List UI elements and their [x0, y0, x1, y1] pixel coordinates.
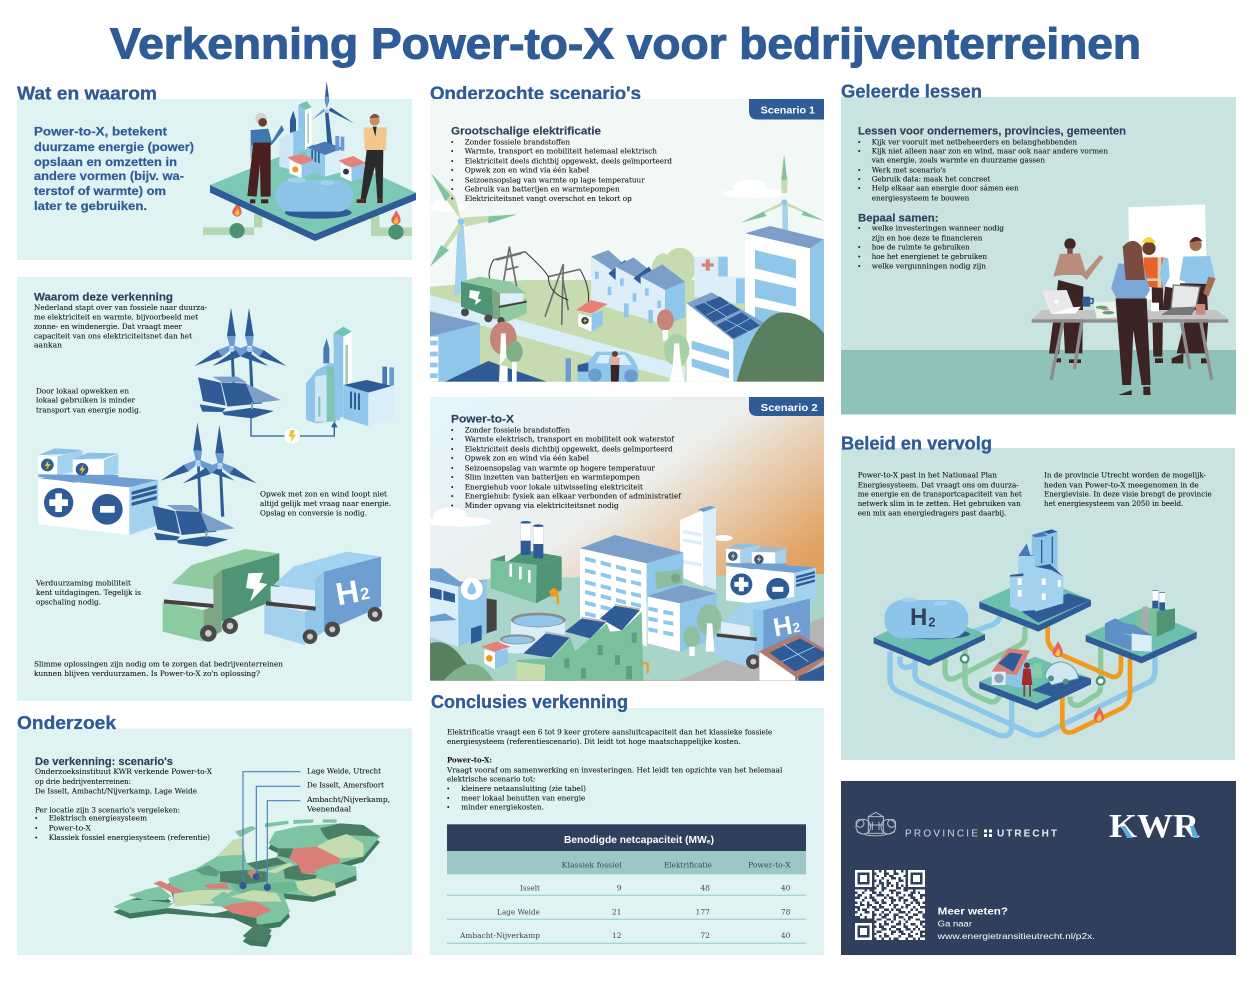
text block: onderzoek: Klassiek fossiel energiesysteem (referentie)	[49, 833, 210, 842]
text: slimme oplossingen: kunnen blijven verduurzamen. Is Power-to-X zo'n oplossing?	[34, 669, 260, 678]
tab: scenario 1	[749, 99, 824, 120]
text: verduurzaming mobiliteit	[35, 578, 141, 606]
text block: conclusies: •	[447, 795, 450, 802]
panel: conclusies verkenning	[430, 692, 824, 955]
table: benodigde netcapaciteit: 177	[696, 907, 710, 916]
arrow: energy line with bolt	[251, 413, 334, 436]
text: opwek met zon en wind	[260, 489, 391, 517]
text: lokaal opwekken: Door lokaal opwekken en	[36, 386, 129, 395]
text: provincie utrecht	[1044, 471, 1212, 508]
text: lessen voor ondernemers: •	[858, 139, 861, 146]
labels: locations: Veenendaal	[306, 804, 352, 813]
text: power-to-x scenario: Elektriciteit deels dichtbij opgewekt, deels geïmporteerd	[465, 444, 673, 453]
text block: power-to-x definition: terstof of warmte) om	[34, 186, 166, 198]
illustration: electric and hydrogen trucks	[163, 549, 382, 645]
panel: scenario 2	[425, 397, 824, 681]
text: grootschalige elektrificatie: •	[451, 149, 454, 156]
text: lokaal opwekken: transport van energie nodig.	[36, 405, 141, 414]
text: grootschalige elektrificatie	[451, 126, 672, 203]
text: power-to-x scenario: •	[451, 493, 454, 500]
location markers with leader lines	[239, 772, 300, 891]
table: benodigde netcapaciteit: Klassiek fossiel	[562, 861, 622, 870]
woman seen from behind	[1111, 241, 1151, 395]
text block: onderzoek: •	[35, 816, 38, 823]
labels: locations: Lage Weide, Utrecht	[307, 766, 381, 775]
illustration: scenario 1 landscape	[430, 155, 824, 383]
text block: introduction: aankan	[34, 341, 62, 350]
text: lokaal opwekken	[36, 386, 141, 414]
illustration: connected energy system: H	[910, 604, 927, 631]
text: bepaal samen: Bepaal samen:	[858, 213, 938, 225]
text: bepaal samen: hoe de ruimte te gebruiken	[872, 243, 970, 252]
text: nationaal plan: een mix aan energiedragers past daarbij.	[858, 508, 1006, 517]
table: benodigde netcapaciteit: 78	[781, 907, 791, 916]
text block: power-to-x definition	[34, 127, 194, 213]
panel: onderzoek	[17, 713, 412, 955]
text: lessen voor ondernemers: •	[858, 149, 861, 156]
heading: onderzochte scenario's: Onderzochte scenario's	[430, 84, 641, 104]
text block: onderzoek: •	[35, 835, 38, 842]
text block: conclusies	[446, 727, 783, 812]
labels: locations	[306, 766, 390, 813]
panel: footer with logos and link	[841, 781, 1236, 955]
illustration: connected energy system: 2	[928, 616, 935, 630]
text: bepaal samen: •	[858, 245, 861, 252]
text: grootschalige elektrificatie: Zonder fossiele brandstoffen	[465, 137, 570, 146]
text block: power-to-x definition: opslaan en omzetten in	[34, 157, 177, 169]
text block: onderzoek: Power-to-X	[49, 823, 92, 832]
text block: power-to-x definition: later te gebruiken.	[34, 201, 147, 213]
text: power-to-x scenario: •	[451, 465, 454, 472]
text: power-to-x scenario: •	[451, 484, 454, 491]
text: verduurzaming mobiliteit: opschaling nodig.	[36, 597, 101, 606]
table: benodigde netcapaciteit: 48	[700, 884, 710, 893]
text: power-to-x scenario: Zonder fossiele brandstoffen	[465, 425, 570, 434]
text: lessen voor ondernemers: Kijk ver vooruit met netbeheerders en belanghebbenden	[872, 137, 1077, 146]
text block: onderzoek: Per locatie zijn 3 scenario's vergeleken:	[35, 805, 180, 814]
text: lessen voor ondernemers	[858, 126, 1126, 202]
text: lessen voor ondernemers: Werk met scenario's	[872, 165, 946, 174]
text block: conclusies: meer lokaal benutten van energie	[461, 793, 586, 802]
table: benodigde netcapaciteit: 40	[781, 931, 791, 940]
text block: conclusies: Power-to-X:	[447, 756, 492, 765]
text: power-to-x scenario: •	[451, 456, 454, 463]
text: grootschalige elektrificatie: •	[451, 158, 454, 165]
text block: power-to-x definition: duurzame energie (power)	[34, 142, 194, 154]
text: grootschalige elektrificatie: •	[451, 196, 454, 203]
text: power-to-x scenario	[451, 414, 682, 510]
table: benodigde netcapaciteit	[447, 824, 806, 944]
panel: waarom deze verkenning	[17, 277, 412, 701]
text: opwek met zon en wind: Opslag en conversie is nodig.	[260, 508, 367, 517]
text: power-to-x scenario: Slim inzetten van batterijen en warmtepompen	[465, 473, 640, 482]
text: lessen voor ondernemers: Help elkaar aan energie door sámen een	[872, 184, 1019, 193]
text: opwek met zon en wind: Opwek met zon en wind loopt niet	[260, 489, 387, 498]
text: grootschalige elektrificatie: Elektriciteit deels dichtbij opgewekt, deels geïmporteerd	[465, 156, 672, 165]
text: lessen voor ondernemers: van energie, zoals warmte en duurzame gassen	[871, 156, 1045, 165]
text: lessen voor ondernemers: Kijk niet alleen naar zon en wind, maar ook naar andere vormen	[872, 147, 1108, 156]
text block: conclusies: kleinere netaansluiting (zie tabel)	[461, 784, 586, 793]
map: netherlands by region	[113, 772, 380, 947]
text: provincie utrecht: In de provincie Utrecht worden de mogelijk-	[1044, 471, 1206, 480]
text: grootschalige elektrificatie: Elektriciteitsnet vangt overschot en tekort op	[465, 194, 632, 203]
text: power-to-x scenario: Seizoensopslag van warmte op hogere temperatuur	[465, 463, 655, 472]
text: bepaal samen: •	[858, 263, 861, 270]
tab: scenario 2: Scenario 2	[761, 402, 818, 414]
text: grootschalige elektrificatie: •	[451, 168, 454, 175]
text block: power-to-x definition: Power-to-X, betekent	[34, 127, 167, 139]
text: power-to-x scenario: •	[451, 427, 454, 434]
text: power-to-x scenario: •	[451, 446, 454, 453]
text block: conclusies: minder energiekosten.	[461, 803, 544, 812]
text: grootschalige elektrificatie: Warmte, transport en mobiliteit helemaal elektrisch	[465, 147, 657, 156]
text block: power-to-x definition: andere vormen (bijv. wa-	[34, 171, 184, 183]
text block: introduction: me elektriciteit en warmte, bijvoorbeeld met	[34, 313, 198, 322]
logo: provincie utrecht: PROVINCIE	[905, 829, 978, 840]
logo: provincie utrecht	[856, 812, 1057, 840]
text: verduurzaming mobiliteit: Verduurzaming mobiliteit	[35, 578, 131, 587]
illustration: battery with wind and solar	[38, 422, 257, 547]
text: grootschalige elektrificatie: •	[451, 177, 454, 184]
text: meer weten	[936, 906, 1095, 941]
table: benodigde netcapaciteit: Power-to-X	[748, 861, 791, 870]
text: provincie utrecht: Energievisie. In deze visie brengt de provincie	[1044, 490, 1212, 499]
table: benodigde netcapaciteit: 12	[612, 931, 622, 940]
text: nationaal plan: netwerk slim in te zetten. Het gebruiken van	[858, 499, 1021, 508]
table: benodigde netcapaciteit: Isselt	[520, 884, 540, 893]
text: grootschalige elektrificatie: •	[451, 139, 454, 146]
panel: wat en waarom	[17, 81, 416, 260]
text: bepaal samen	[858, 213, 1004, 270]
text: bepaal samen: welke investeringen wanneer nodig	[872, 224, 1004, 233]
illustration: connected energy system	[874, 529, 1197, 736]
table	[1032, 310, 1228, 319]
text: lokaal opwekken: lokaal gebruiken is minder	[36, 396, 135, 405]
text: lessen voor ondernemers: •	[858, 177, 861, 184]
table: benodigde netcapaciteit: Ambacht-Nijverkamp	[459, 931, 540, 940]
illustration: electric and hydrogen trucks: H	[333, 573, 362, 612]
text: nationaal plan: Power-to-X past in het Nationaal Plan	[858, 471, 997, 480]
text: power-to-x scenario: Energiehub voor lokale uitwisseling elektriciteit	[465, 482, 643, 491]
text block: introduction: zonne- en windenergie. Dat vraagt meer	[34, 322, 182, 331]
qr code	[855, 871, 925, 939]
labels: locations: De Isselt, Amersfoort	[307, 781, 384, 790]
labels: locations: Ambacht/Nijverkamp,	[306, 795, 390, 804]
text block: onderzoek: op drie bedrijventerreinen:	[35, 777, 131, 786]
table: benodigde netcapaciteit: 72	[700, 931, 710, 940]
text block: introduction: capaciteit van ons elektriciteitsnet dan het	[34, 331, 192, 340]
text: lessen voor ondernemers: energiesysteem te bouwen	[872, 193, 969, 202]
logo: kwr: KWR	[1109, 808, 1199, 845]
text: power-to-x scenario: Warmte elektrisch, transport en mobiliteit ook waterstof	[465, 435, 675, 444]
table: benodigde netcapaciteit: 40	[781, 884, 791, 893]
text: bepaal samen: welke vergunningen nodig zijn	[872, 261, 986, 270]
text block: onderzoek: Elektrisch energiesysteem	[49, 814, 147, 823]
text: power-to-x scenario: Opwek zon en wind via één kabel	[465, 454, 590, 463]
table: benodigde netcapaciteit: 9	[617, 884, 622, 893]
subheading: de verkenning scenario's: De verkenning: scenario's	[35, 756, 173, 768]
text: grootschalige elektrificatie: Opwek zon en wind via één kabel	[465, 166, 590, 175]
text: slimme oplossingen	[34, 659, 283, 678]
text block: conclusies: Vraagt vooraf om samenwerking en investeringen. Het leidt ten opzichte van het helemaal	[446, 765, 783, 774]
text: bepaal samen: •	[858, 226, 861, 233]
illustration: people meeting around a table	[1032, 204, 1228, 395]
illustration: electric and hydrogen trucks: 2	[359, 584, 371, 604]
table: benodigde netcapaciteit: Elektrificatie	[664, 861, 712, 870]
text: verduurzaming mobiliteit: kent uitdagingen. Tegelijk is	[36, 588, 141, 597]
illustration: platform with people and energy system	[203, 81, 416, 241]
panel: geleerde lessen	[841, 82, 1236, 414]
text: power-to-x scenario: Minder opvang via elektriciteitsnet nodig	[465, 501, 619, 510]
table: benodigde netcapaciteit: Lage Weide	[497, 907, 540, 916]
text: meer weten: Ga naar	[938, 920, 972, 929]
text: grootschalige elektrificatie: Gebruik van batterijen en warmtepompen	[465, 185, 620, 194]
text: grootschalige elektrificatie: Grootschalige elektrificatie	[451, 126, 601, 138]
title: Verkenning Power-to-X voor bedrijventerreinen	[110, 19, 1141, 68]
text block: introduction: Nederland stapt over van fossiele naar duurza-	[34, 303, 207, 312]
text: nationaal plan	[858, 471, 1022, 517]
text block: conclusies: •	[447, 786, 450, 793]
text block: onderzoek: De Isselt, Ambacht/Nijverkamp, Lage Weide	[35, 786, 197, 795]
text: bepaal samen: •	[858, 254, 861, 261]
text: nationaal plan: me energie en de transportcapaciteit van het	[858, 490, 1022, 499]
text: nationaal plan: Energiesysteem. Dat vraagt ons om duurza-	[858, 480, 1019, 489]
text: meer weten: Meer weten?	[938, 906, 1008, 917]
text: opwek met zon en wind: altijd gelijk met vraag naar energie.	[260, 499, 391, 508]
text: provincie utrecht: heden van Power-to-X meegenomen in de	[1044, 480, 1199, 489]
text block: onderzoek	[35, 767, 213, 842]
panel: beleid en vervolg	[841, 434, 1235, 760]
text: lessen voor ondernemers: Gebruik data: maak het concreet	[872, 175, 990, 184]
text: bepaal samen: zijn en hoe deze te financieren	[872, 233, 982, 242]
illustration: scenario 2 landscape: 2	[792, 620, 801, 636]
text: lessen voor ondernemers: •	[858, 167, 861, 174]
text: grootschalige elektrificatie: •	[451, 187, 454, 194]
tab: scenario 2	[749, 397, 824, 416]
table: benodigde netcapaciteit: Benodigde netcapaciteit (MWₑ)	[564, 835, 714, 846]
text block: conclusies: •	[447, 805, 450, 812]
text block: conclusies: elektrische scenario tot:	[447, 774, 535, 783]
heading: wat en waarom: Wat en waarom	[17, 84, 157, 104]
heading: geleerde lessen: Geleerde lessen	[841, 82, 982, 102]
text block: conclusies: energiesysteem (referentiescenario). Dit leidt tot hoge maatschappelijke kosten.	[447, 737, 741, 746]
heading: waarom deze verkenning: Waarom deze verkenning	[34, 292, 173, 304]
text: power-to-x scenario: •	[451, 475, 454, 482]
text: lessen voor ondernemers: Lessen voor ondernemers, provincies, gemeenten	[858, 126, 1126, 138]
text: power-to-x scenario: Power-to-X	[451, 414, 515, 426]
text block: onderzoek: Onderzoeksinstituut KWR verkende Power-to-X	[35, 767, 213, 776]
tab: scenario 1: Scenario 1	[761, 104, 815, 116]
text: meer weten: www.energietransitieutrecht.nl/p2x.	[936, 932, 1095, 941]
text: grootschalige elektrificatie: Seizoensopslag van warmte op lage temperatuur	[465, 175, 645, 184]
illustration: scenario 2 landscape: H	[771, 610, 795, 643]
text block: onderzoek: •	[35, 825, 38, 832]
panel: scenario 1	[430, 99, 824, 383]
logo: provincie utrecht: UTRECHT	[997, 829, 1057, 840]
illustration: scenario 2 landscape	[425, 506, 824, 681]
heading: conclusies verkenning: Conclusies verkenning	[431, 692, 628, 712]
text: provincie utrecht: het energiesysteem van 2050 in beeld.	[1044, 499, 1183, 508]
text: power-to-x scenario: •	[451, 503, 454, 510]
text block: conclusies: Elektrificatie vraagt een 6 tot 9 keer grotere aansluitcapaciteit dan het klassieke fossiele	[447, 727, 773, 736]
table: benodigde netcapaciteit: 21	[612, 907, 622, 916]
text: slimme oplossingen: Slimme oplossingen zijn nodig om te zorgen dat bedrijventerreinen	[34, 659, 283, 668]
heading: beleid en vervolg: Beleid en vervolg	[841, 434, 992, 454]
text: bepaal samen: hoe het energienet te gebruiken	[872, 252, 987, 261]
text block: introduction	[34, 303, 207, 350]
text: lessen voor ondernemers: •	[858, 186, 861, 193]
heading: onderzoek: Onderzoek	[17, 713, 117, 733]
illustration: wind and sun to city	[194, 308, 395, 444]
text: power-to-x scenario: Energiehub: fysiek aan elkaar verbonden of administratief	[465, 491, 682, 500]
text: power-to-x scenario: •	[451, 437, 454, 444]
